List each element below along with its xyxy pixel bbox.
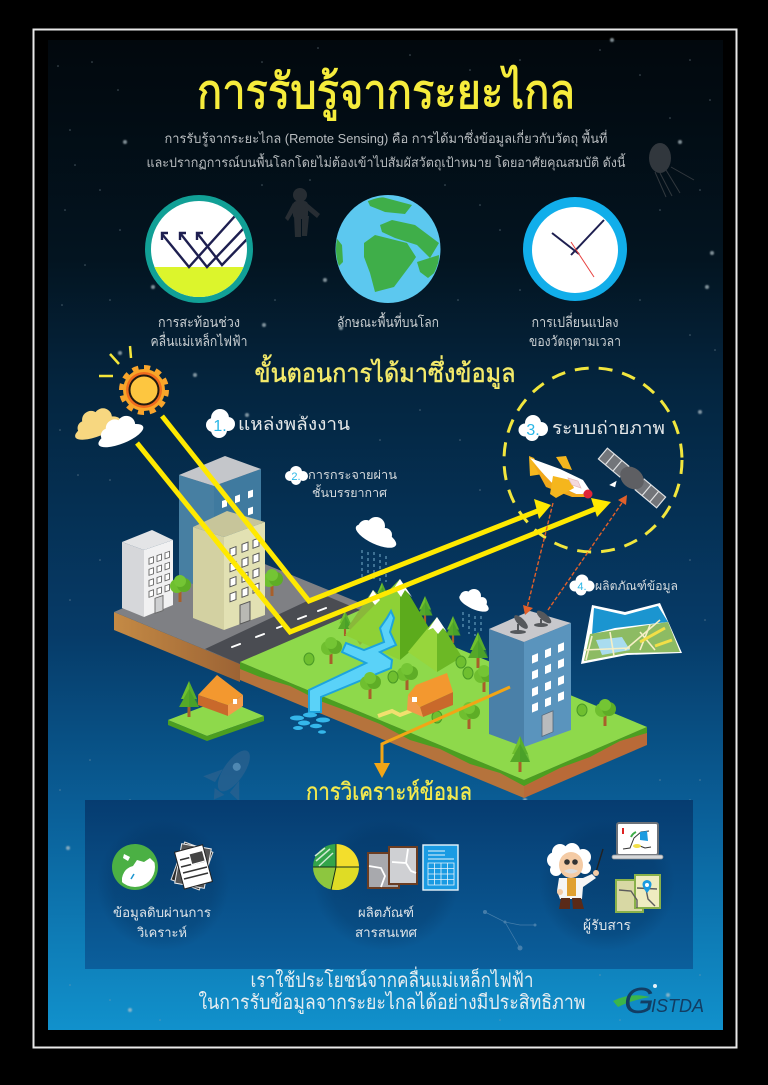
panel: analysis outputs (85, 800, 693, 969)
label: raw data: ข้อมูลดิบผ่านการ (113, 905, 211, 921)
pine trees by mountains (338, 582, 488, 668)
step 1 label (206, 409, 350, 438)
label: raw data: วิเคราะห์ (136, 925, 187, 940)
step 2 label: การกระจายผ่าน (308, 468, 397, 482)
label: change over time: ของวัตถุตามเวลา (529, 333, 621, 350)
step 3 label: ระบบถ่ายภาพ (552, 418, 665, 438)
tree: front of station (510, 736, 530, 772)
label: information products: สารสนเทศ (355, 925, 418, 940)
icon: data table (423, 845, 458, 890)
label: information products (355, 905, 418, 940)
icon: satellite (590, 446, 668, 518)
icon: pie chart (313, 844, 359, 890)
icon: recipient maps (616, 875, 660, 912)
label: change over time: การเปลี่ยนแปลง (532, 313, 618, 330)
tree: right (262, 569, 283, 596)
icon: raw data globe (112, 844, 158, 892)
icon: laptop (612, 823, 663, 859)
label: raw data (113, 905, 211, 940)
step 2 label: 2. (291, 471, 301, 483)
icon: electromagnetic reflection (145, 195, 253, 303)
icon: documents (171, 842, 213, 890)
building: beige (193, 511, 265, 630)
closing statement: ในการรับข้อมูลจากระยะไกลได้อย่างมีประสิทธิภาพ (198, 991, 586, 1015)
isometric scene: ground (114, 556, 647, 798)
astronaut ghost (285, 188, 320, 237)
icon: earth (330, 195, 440, 303)
label: reflection: คลื่นแม่เหล็กไฟฟ้า (150, 332, 248, 349)
tree: left (170, 575, 191, 602)
small island with house (168, 675, 264, 741)
label: reflection (150, 314, 248, 349)
icon: scientist (547, 843, 603, 909)
house: centre (407, 673, 453, 717)
dashed data links (523, 495, 627, 615)
mountains (345, 579, 462, 672)
step 3 label: 3. (526, 422, 540, 439)
closing statement (198, 966, 586, 1015)
orange analysis arrow (374, 687, 510, 778)
constellation (483, 910, 536, 950)
step 4 label: 4. (577, 581, 587, 593)
icon: grey maps (368, 847, 417, 888)
title: การรับรู้จากระยะไกล (197, 64, 575, 121)
building: back blue (179, 456, 261, 590)
label: change over time (529, 313, 621, 350)
icon: clock (523, 197, 627, 301)
intro text (146, 129, 626, 171)
intro text: การรับรู้จากระยะไกล (Remote Sensing) คือ การได้มาซึ่งข้อมูลเกี่ยวกับวัตถุ พื้นที่ (164, 129, 608, 147)
label: information products: ผลิตภัณฑ์ (358, 905, 414, 920)
logo: GISTDA (613, 980, 704, 1021)
heading: data acquisition: ขั้นตอนการได้มาซึ่งข้อมูล (254, 354, 516, 389)
dashed circle: imaging system (504, 368, 682, 552)
energy beams (137, 416, 611, 632)
step 2 label (285, 466, 397, 500)
heading: data analysis: การวิเคราะห์ข้อมูล (306, 778, 472, 807)
rain cloud: lower (457, 589, 491, 636)
closing statement: เราใช้ประโยชน์จากคลื่นแม่เหล็กไฟฟ้า (250, 966, 534, 992)
logo: GISTDA: ISTDA (651, 996, 704, 1016)
icon: sun (99, 346, 166, 412)
trees on grass (304, 637, 616, 729)
icon: clouds (68, 401, 146, 452)
label: recipients: ผู้รับสาร (583, 917, 631, 934)
path to house (378, 708, 418, 716)
label: reflection: การสะท้อนช่วง (158, 314, 240, 330)
rocket ghost (196, 739, 266, 812)
rain cloud: upper (353, 517, 399, 584)
step 3 label (518, 415, 665, 441)
label: land features: ลักษณะพื้นที่บนโลก (337, 312, 439, 330)
logo: GISTDA: G (624, 980, 654, 1021)
building: data receiving station (489, 609, 571, 747)
step 2 label: ชั้นบรรยากาศ (312, 484, 387, 500)
sputnik ghost (649, 143, 694, 197)
intro text: และปรากฏการณ์บนพื้นโลกโดยไม่ต้องเข้าไปสัมผัสวัตถุเป้าหมาย โดยอาศัยคุณสมบัติ ดังนี้ (146, 153, 626, 171)
step 1 label: แหล่งพลังงาน (238, 414, 350, 434)
step 4 label (570, 574, 678, 596)
step 4 label: ผลิตภัณฑ์ข้อมูล (595, 579, 678, 594)
icon: airplane (529, 456, 592, 498)
building: white (122, 530, 173, 617)
step 1 label: 1. (213, 418, 227, 435)
river and waterfall (290, 611, 396, 734)
background stars (58, 40, 715, 1020)
icon: map product (581, 603, 682, 664)
